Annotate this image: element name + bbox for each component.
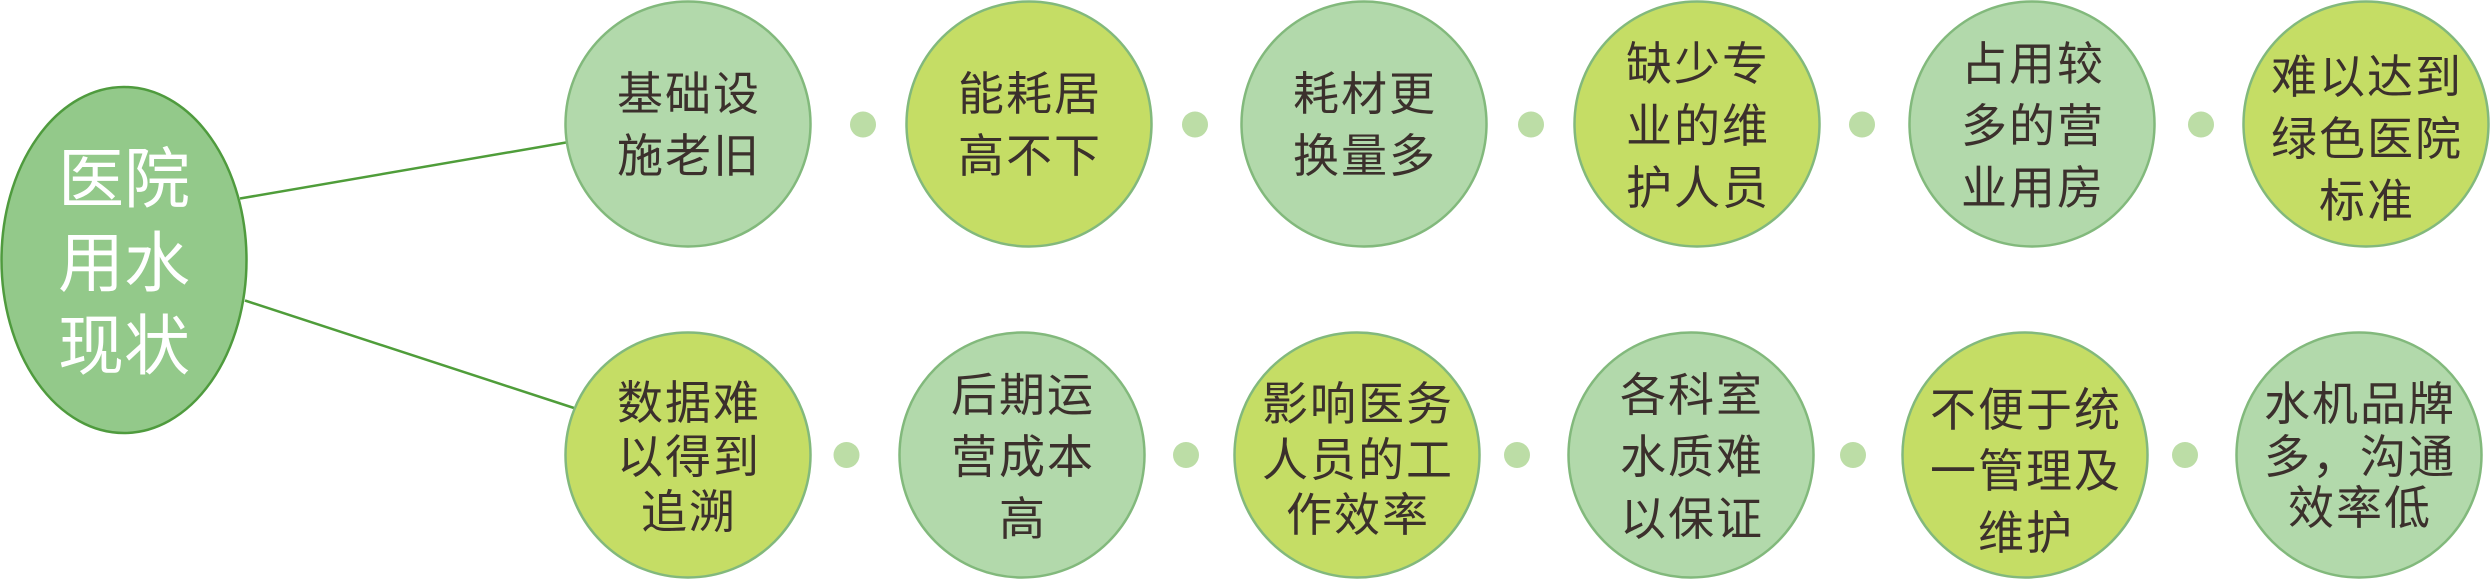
node: 耗材更换量多: 换量多 (1293, 130, 1437, 182)
node: 基础设施老旧: 基础设 (617, 68, 761, 120)
node: 基础设施老旧: 施老旧 (617, 130, 761, 182)
dot: top 1 (850, 112, 876, 138)
node: 后期运营成本高: 后期运 (951, 369, 1095, 421)
node: 后期运营成本高: 高 (999, 493, 1047, 545)
connector: centre to bottom row (245, 300, 574, 408)
node: 各科室水质难以保证: 水质难 (1620, 431, 1764, 483)
node: 缺少专业的维护人员: 护人员 (1626, 162, 1770, 214)
node: 耗材更换量多 (1242, 2, 1486, 246)
dot: bottom 4 (1840, 442, 1866, 468)
node: 水机品牌多，沟通效率低: 多，沟通 (2264, 431, 2456, 483)
node: 能耗居高不下: 能耗居 (958, 68, 1102, 120)
node: 不便于统一管理及维护: 一管理及 (1930, 445, 2122, 497)
node: 缺少专业的维护人员: 缺少专 (1626, 38, 1770, 90)
dot: bottom 2 (1173, 442, 1199, 468)
node: 影响医务人员的工作效率: 影响医务 (1262, 378, 1454, 430)
node: 难以达到绿色医院标准 (2244, 2, 2488, 246)
dot: top 4 (1849, 112, 1875, 138)
central node: 医院用水现状: 医院 (58, 142, 190, 216)
node: 不便于统一管理及维护 (1902, 332, 2148, 578)
node: 各科室水质难以保证 (1568, 332, 1814, 578)
node: 能耗居高不下: 高不下 (958, 130, 1102, 182)
node: 影响医务人员的工作效率: 作效率 (1286, 489, 1430, 541)
node: 难以达到绿色医院标准: 难以达到 (2271, 51, 2463, 103)
node: 水机品牌多，沟通效率低 (2236, 332, 2482, 578)
node: 能耗居高不下 (906, 2, 1152, 246)
node: 各科室水质难以保证: 以保证 (1620, 493, 1764, 545)
dot: bottom 1 (834, 442, 860, 468)
node: 水机品牌多，沟通效率低: 水机品牌 (2264, 378, 2456, 430)
node: 数据难以得到追溯: 追溯 (641, 486, 737, 538)
node: 基础设施老旧 (566, 2, 810, 246)
node: 数据难以得到追溯 (566, 332, 810, 578)
node: 占用较多的营业用房 (1910, 2, 2154, 246)
node: 水机品牌多，沟通效率低: 效率低 (2288, 482, 2432, 534)
central node: 医院用水现状: 现状 (58, 309, 190, 383)
node: 耗材更换量多: 耗材更 (1293, 68, 1437, 120)
node: 后期运营成本高 (900, 332, 1144, 578)
node: 难以达到绿色医院标准: 绿色医院 (2271, 113, 2463, 165)
node: 不便于统一管理及维护: 维护 (1978, 507, 2074, 559)
node: 占用较多的营业用房: 占用较 (1961, 38, 2105, 90)
dot: top 2 (1182, 112, 1208, 138)
node: 影响医务人员的工作效率 (1234, 332, 1480, 578)
node: 不便于统一管理及维护: 不便于统 (1930, 384, 2122, 436)
dot: top 5 (2188, 112, 2214, 138)
node: 数据难以得到追溯: 数据难 (617, 377, 761, 429)
connector: centre to top row (240, 142, 566, 198)
node: 缺少专业的维护人员: 业的维 (1626, 100, 1770, 152)
node: 难以达到绿色医院标准: 标准 (2319, 175, 2415, 227)
node: 占用较多的营业用房: 业用房 (1961, 162, 2105, 214)
central node: 医院用水现状: 用水 (58, 226, 190, 300)
node: 各科室水质难以保证: 各科室 (1620, 369, 1764, 421)
dot: bottom 5 (2172, 442, 2198, 468)
node: 缺少专业的维护人员 (1574, 2, 1820, 246)
dot: top 3 (1518, 112, 1544, 138)
central node: 医院用水现状 (2, 87, 246, 433)
node: 影响医务人员的工作效率: 人员的工 (1262, 434, 1454, 486)
node: 数据难以得到追溯: 以得到 (617, 431, 761, 483)
node: 占用较多的营业用房: 多的营 (1961, 100, 2105, 152)
node: 后期运营成本高: 营成本 (951, 431, 1095, 483)
dot: bottom 3 (1504, 442, 1530, 468)
